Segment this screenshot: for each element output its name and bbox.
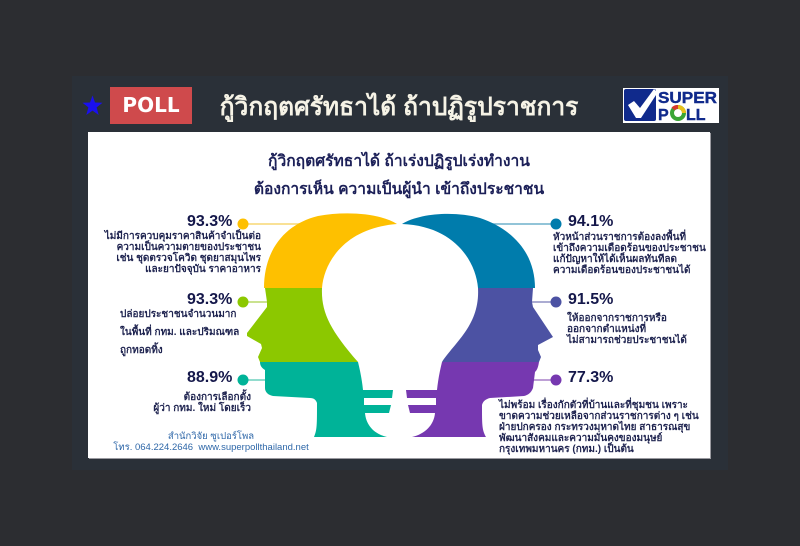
left head: teal neck bbox=[260, 362, 393, 437]
text: left middle: ในพื้นที่ กทม. และปริมณฑล bbox=[120, 327, 239, 338]
text: left bottom bbox=[153, 389, 251, 414]
right head: indigo face bbox=[442, 288, 553, 362]
text: right middle bbox=[566, 312, 687, 346]
subtitle heading: กู้วิกฤตศรัทธาได้ ถ้าเร่งปฏิรูปเร่งทำงาน bbox=[268, 153, 530, 170]
text: right top: เข้าถึงความเดือดร้อนของประชาชน bbox=[553, 243, 706, 254]
white content panel bbox=[88, 132, 710, 458]
text: right top: แก้ปัญหาให้ได้เห็นผลทันทีลด bbox=[553, 254, 677, 265]
contact credit: สำนักวิจัย ซูเปอร์โพล bbox=[168, 431, 254, 442]
logo: super poll bbox=[623, 88, 719, 123]
text: left top: และยาปัจจุบัน ราคาอาหาร bbox=[145, 264, 261, 275]
text: right middle: ไม่สามารถช่วยประชาชนได้ bbox=[567, 335, 687, 346]
subtitle heading: ต้องการเห็น ความเป็นผู้นำ เข้าถึงประชาชน bbox=[254, 181, 544, 198]
stat 91.5 right middle: 91.5% bbox=[568, 291, 613, 308]
stat 93.3 left middle: 93.3% bbox=[187, 291, 232, 308]
text: right top: ความเดือดร้อนของประชาชนได้ bbox=[553, 265, 690, 276]
text: left middle bbox=[120, 308, 239, 356]
text: left top: เช่น ชุดตรวจโควิด ชุดยาสมุนไพร bbox=[116, 253, 261, 264]
left head: yellow crown bbox=[264, 213, 397, 288]
text: right bottom: พัฒนาสังคมและความมั่นคงของมนุษย์ bbox=[499, 433, 662, 444]
text: left top: ไม่มีการควบคุมราคาสินค้าจำเป็นต่อ bbox=[105, 231, 261, 242]
logo: super poll: SUPER bbox=[658, 90, 717, 107]
text: right bottom: ขาดความช่วยเหลือจากส่วนราชการต่าง ๆ เช่น bbox=[499, 411, 699, 422]
text: right bottom: ไม่พร้อม เรื่องกักตัวที่บ้านและที่ชุมชน เพราะ bbox=[499, 400, 688, 411]
text: right top bbox=[553, 229, 706, 276]
stat 94.1 right top: 94.1% bbox=[568, 213, 613, 230]
text: right bottom: กรุงเทพมหานคร (กทม.) เป็นต้น bbox=[499, 444, 634, 455]
subtitle heading bbox=[254, 152, 544, 198]
POLL badge: POLL bbox=[122, 93, 180, 117]
text: left middle: ปล่อยประชาชนจำนวนมาก bbox=[120, 309, 236, 320]
text: right top: หัวหน้าส่วนราชการต้องลงพื้นที่ bbox=[553, 232, 686, 243]
text: left bottom: ต้องการเลือกตั้ง bbox=[184, 392, 251, 403]
contact credit: โทร. 064.224.2646 www.superpollthailand.net bbox=[113, 442, 309, 452]
text: right middle: ให้ออกจากราชการหรือ bbox=[567, 313, 667, 324]
text: left bottom: ผู้ว่า กทม. ใหม่ โดยเร็ว bbox=[153, 403, 251, 414]
right head: blue crown bbox=[402, 214, 535, 288]
text: left middle: ถูกทอดทิ้ง bbox=[120, 345, 163, 356]
stat 93.3 left top: 93.3% bbox=[187, 213, 232, 230]
text: left top: ความเป็นความตายของประชาชน bbox=[117, 242, 261, 253]
dots bbox=[238, 218, 248, 230]
text: left top bbox=[104, 229, 261, 275]
icon: blue star bbox=[82, 96, 102, 115]
text: right bottom bbox=[498, 397, 699, 455]
stat 77.3 right bottom: 77.3% bbox=[568, 369, 613, 386]
connector lines bbox=[243, 224, 557, 380]
textured header backdrop bbox=[72, 76, 728, 470]
text: right bottom: ฝ่ายปกครอง กระทรวงมหาดไทย สาธารณสุข bbox=[499, 422, 690, 433]
right head: purple neck bbox=[406, 362, 539, 437]
main title: กู้วิกฤตศรัทธาได้ ถ้าปฏิรูปราชการ bbox=[220, 94, 578, 121]
POLL badge bbox=[110, 87, 192, 124]
left head: green face bbox=[247, 288, 358, 362]
contact credit bbox=[113, 430, 309, 452]
stat 88.9 left bottom: 88.9% bbox=[187, 369, 232, 386]
text: right middle: ออกจากตำแหน่งที่ bbox=[567, 324, 646, 335]
